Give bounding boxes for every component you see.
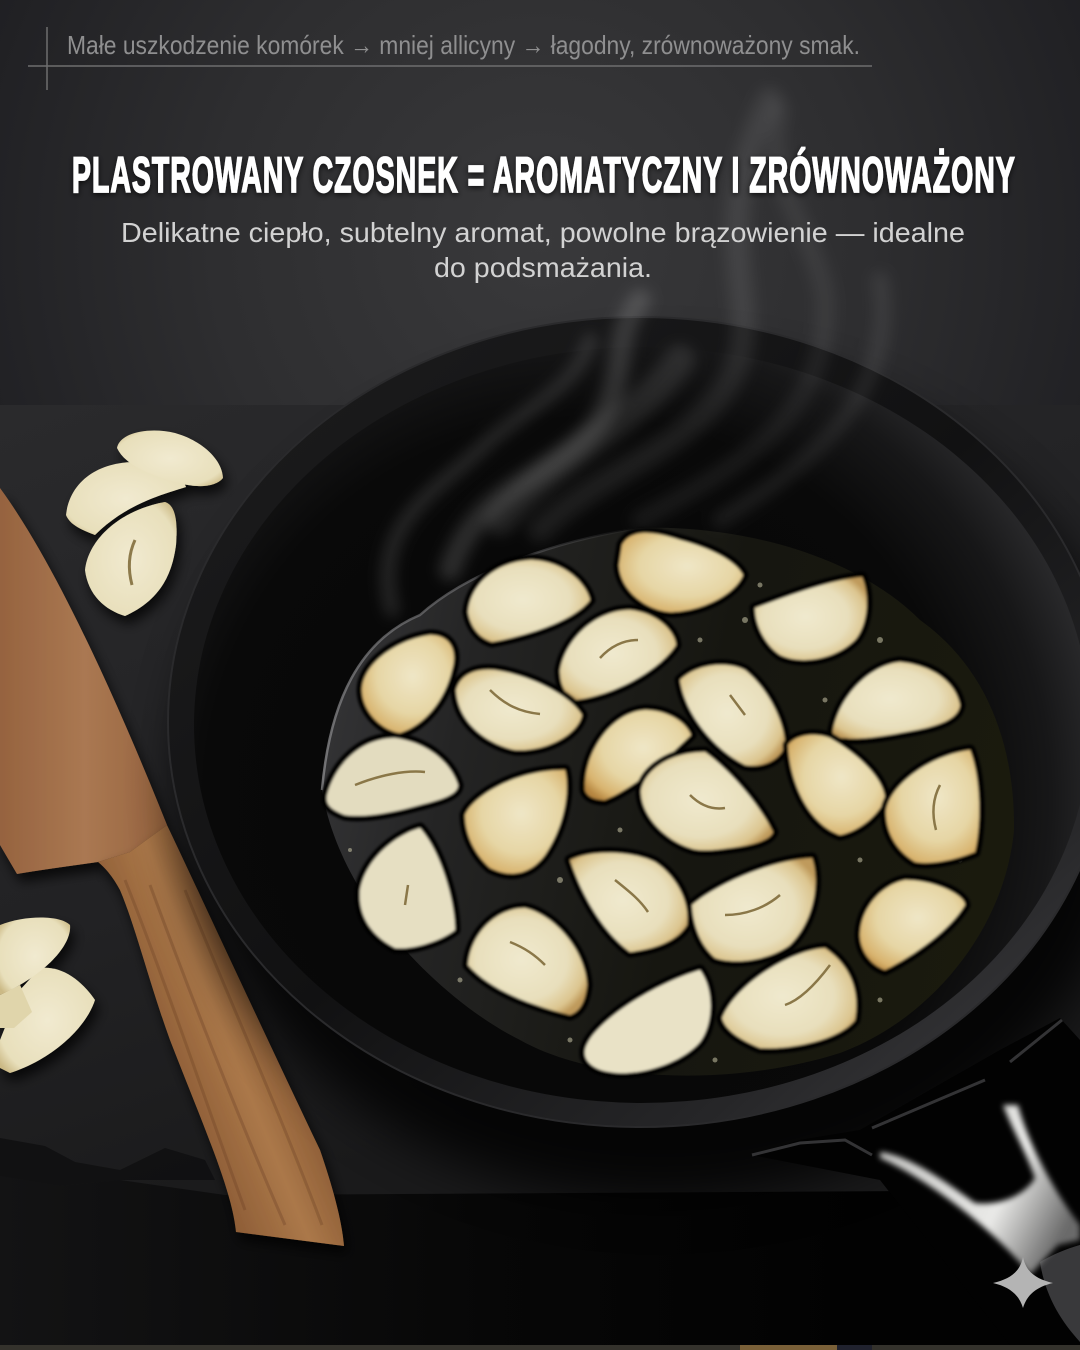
slice 7 [680,665,785,766]
slice [117,431,223,486]
icon: sparkle [993,1257,1053,1308]
slice 6 [456,670,582,750]
garlic beside the knife [0,431,223,1073]
title: PLASTROWANY CZOSNEK = AROMATYCZNY I ZRÓWNOWAŻONY [72,147,1015,203]
slice [0,918,70,995]
slice 1 [619,533,743,612]
slice 17 [692,858,816,961]
slice 8 [833,662,960,739]
subtitle: Delikatne ciepło, subtelny aromat, powolne brązowienie — idealne [121,217,965,248]
oil pool [322,528,1014,1076]
top caption with crosshair lines: Małe uszkodzenie komórek → mniej allicyny → łagodny, zrównoważony smak. [67,30,860,60]
pan rim [168,317,1080,1127]
slice 3 [755,577,867,660]
slice 2 [468,560,590,642]
slice 16 [570,853,687,952]
slice 12 [788,735,885,835]
slice [0,985,32,1028]
slice [66,462,186,535]
oil edge highlight [322,528,640,790]
slice 18 [860,880,965,970]
slice 15 [360,828,455,948]
oil droplets [348,582,962,1062]
slate board [0,405,1080,1195]
garlic slices in pan [327,533,979,1073]
pan interior [194,347,1080,1103]
slice 21 [722,948,856,1048]
slice 5 [362,635,454,733]
slice 13 [886,750,979,863]
slice 4 [560,610,676,700]
knife [0,488,344,1246]
table below the slate [0,1170,1080,1350]
steam [388,100,883,610]
knife blade [0,488,167,874]
subtitle: do podsmażania. [434,252,652,283]
slice [0,968,95,1073]
slice 19 [468,908,587,1015]
pan shadow [180,360,1080,1200]
bottom edge strip [0,1345,1080,1350]
slice [85,502,177,616]
top caption with crosshair lines [28,27,872,90]
slice 10 [327,738,458,816]
slice 11 [641,752,773,850]
knife handle [98,825,344,1246]
slice 9 [585,710,691,800]
subtitle [121,217,965,283]
slice 14 [465,770,567,874]
pan handle [752,1018,1080,1350]
frying pan [168,317,1080,1350]
slice 20 [585,970,711,1073]
garlic creases [355,640,940,1005]
